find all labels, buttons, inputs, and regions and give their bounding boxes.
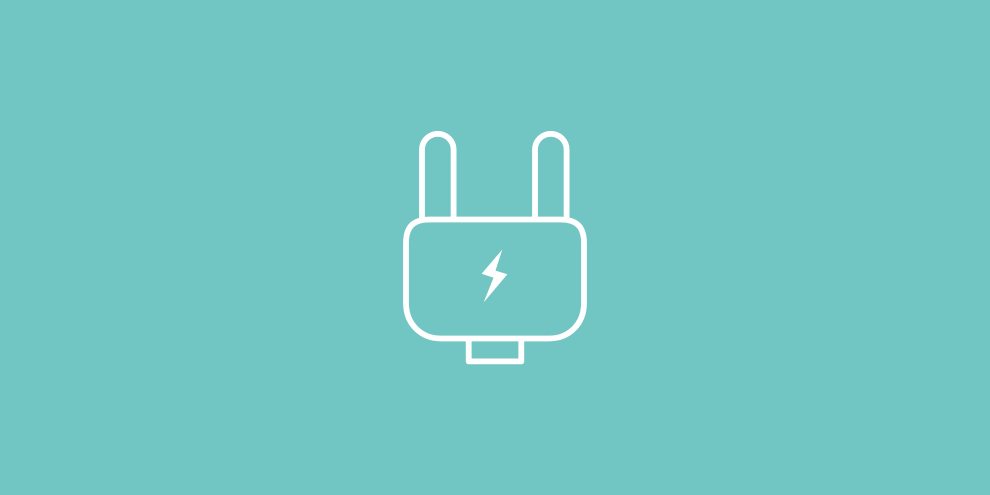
icon: bottom connector tab — [469, 338, 521, 361]
icon: right prong — [535, 134, 567, 220]
icon: left prong — [422, 134, 454, 220]
icon: plug body — [406, 220, 584, 338]
icon: electric plug — [406, 134, 584, 361]
icon: lightning bolt — [482, 250, 507, 302]
